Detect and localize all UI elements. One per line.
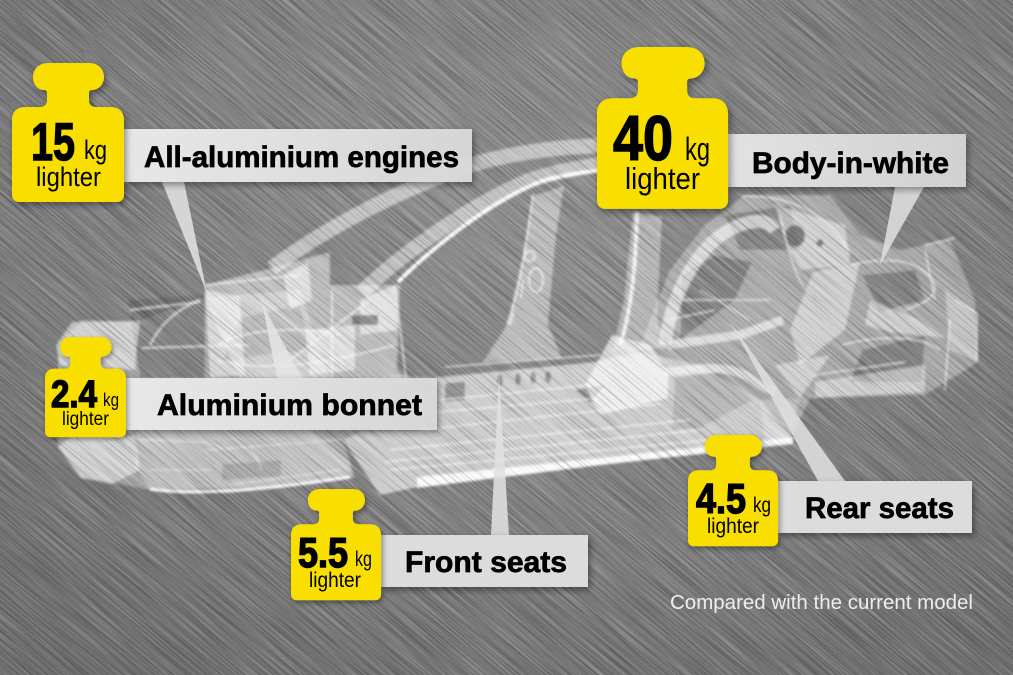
footnote: Compared with the current model xyxy=(670,592,973,614)
roof rail inner xyxy=(362,160,660,292)
weight badge: 5.5 kg lighter xyxy=(291,489,381,600)
sill punched details xyxy=(445,371,605,403)
weight badge: 4.5 kg lighter: 4.5 xyxy=(696,475,746,522)
roof white edge xyxy=(398,167,650,282)
rear inner panels xyxy=(775,205,945,398)
B-pillar details xyxy=(507,194,543,325)
engine bright zones xyxy=(205,262,398,378)
rear tail panel xyxy=(945,290,978,362)
rear holes xyxy=(785,225,824,247)
callout: all-aluminium engines: All-aluminium engines xyxy=(144,141,459,174)
weight badge: 15 kg lighter: kg xyxy=(84,135,107,165)
C-pillar white stripe xyxy=(620,212,637,345)
B-pillar xyxy=(483,186,564,362)
callout: front seats: Front seats xyxy=(405,546,567,579)
weight badge: 40 kg lighter: kg xyxy=(685,131,710,167)
sill rib lines xyxy=(385,355,710,470)
weight badge: 15 kg lighter: lighter xyxy=(36,162,101,192)
dark openings xyxy=(128,205,925,480)
lower bumper xyxy=(58,436,140,484)
rear floor rail xyxy=(665,320,783,392)
weight badge: 40 kg lighter: lighter xyxy=(625,161,700,196)
weight badge: 2.4 kg lighter: lighter xyxy=(62,409,110,430)
front bumper xyxy=(56,321,140,370)
callout: rear seats: Rear seats xyxy=(805,492,954,525)
callout: rear seats xyxy=(730,322,972,533)
callout: aluminium bonnet: Aluminium bonnet xyxy=(157,389,422,422)
weight badge: 4.5 kg lighter: kg xyxy=(753,494,771,517)
callout: all-aluminium engines xyxy=(124,129,472,293)
weight badge: 40 kg lighter: 40 xyxy=(613,104,673,174)
junction bright zone xyxy=(585,335,668,415)
callout: aluminium bonnet xyxy=(126,303,437,430)
weight badge: 2.4 kg lighter: 2.4 xyxy=(51,374,97,416)
inner rear arch stem xyxy=(760,398,800,445)
weight badge: 15 kg lighter: 15 xyxy=(31,113,75,172)
engine bay lines xyxy=(130,275,406,378)
rear wheel arch bands xyxy=(665,221,775,345)
weight badge: 4.5 kg lighter xyxy=(688,435,778,546)
sill white band xyxy=(417,437,793,488)
weight badge: 2.4 kg lighter: kg xyxy=(103,390,119,410)
car body structure x-ray xyxy=(56,145,978,495)
front underfloor xyxy=(135,430,352,490)
C-pillar xyxy=(612,212,668,352)
sill and floor xyxy=(343,352,793,495)
weight badge: 5.5 kg lighter: kg xyxy=(355,548,372,571)
callout: body-in-white: Body-in-white xyxy=(752,147,949,180)
weight badge: 5.5 kg lighter: lighter xyxy=(309,569,361,592)
weight badge: 15 kg lighter xyxy=(12,63,124,202)
callout: front seats xyxy=(381,375,588,587)
weight badge: 4.5 kg lighter: lighter xyxy=(707,515,759,538)
roof rail outer xyxy=(272,145,660,268)
weight badge: 2.4 kg lighter xyxy=(45,337,126,437)
A-pillar base and engine bay xyxy=(205,252,405,378)
overall body veil xyxy=(58,195,978,495)
rear lines xyxy=(668,196,977,390)
weight badge: 40 kg lighter xyxy=(597,47,728,209)
underfloor white edge xyxy=(150,477,350,492)
dark slot in bay xyxy=(352,315,378,325)
callout: body-in-white xyxy=(728,134,966,265)
underfloor lines xyxy=(140,432,348,485)
weight badge: 5.5 kg lighter: 5.5 xyxy=(298,529,348,576)
